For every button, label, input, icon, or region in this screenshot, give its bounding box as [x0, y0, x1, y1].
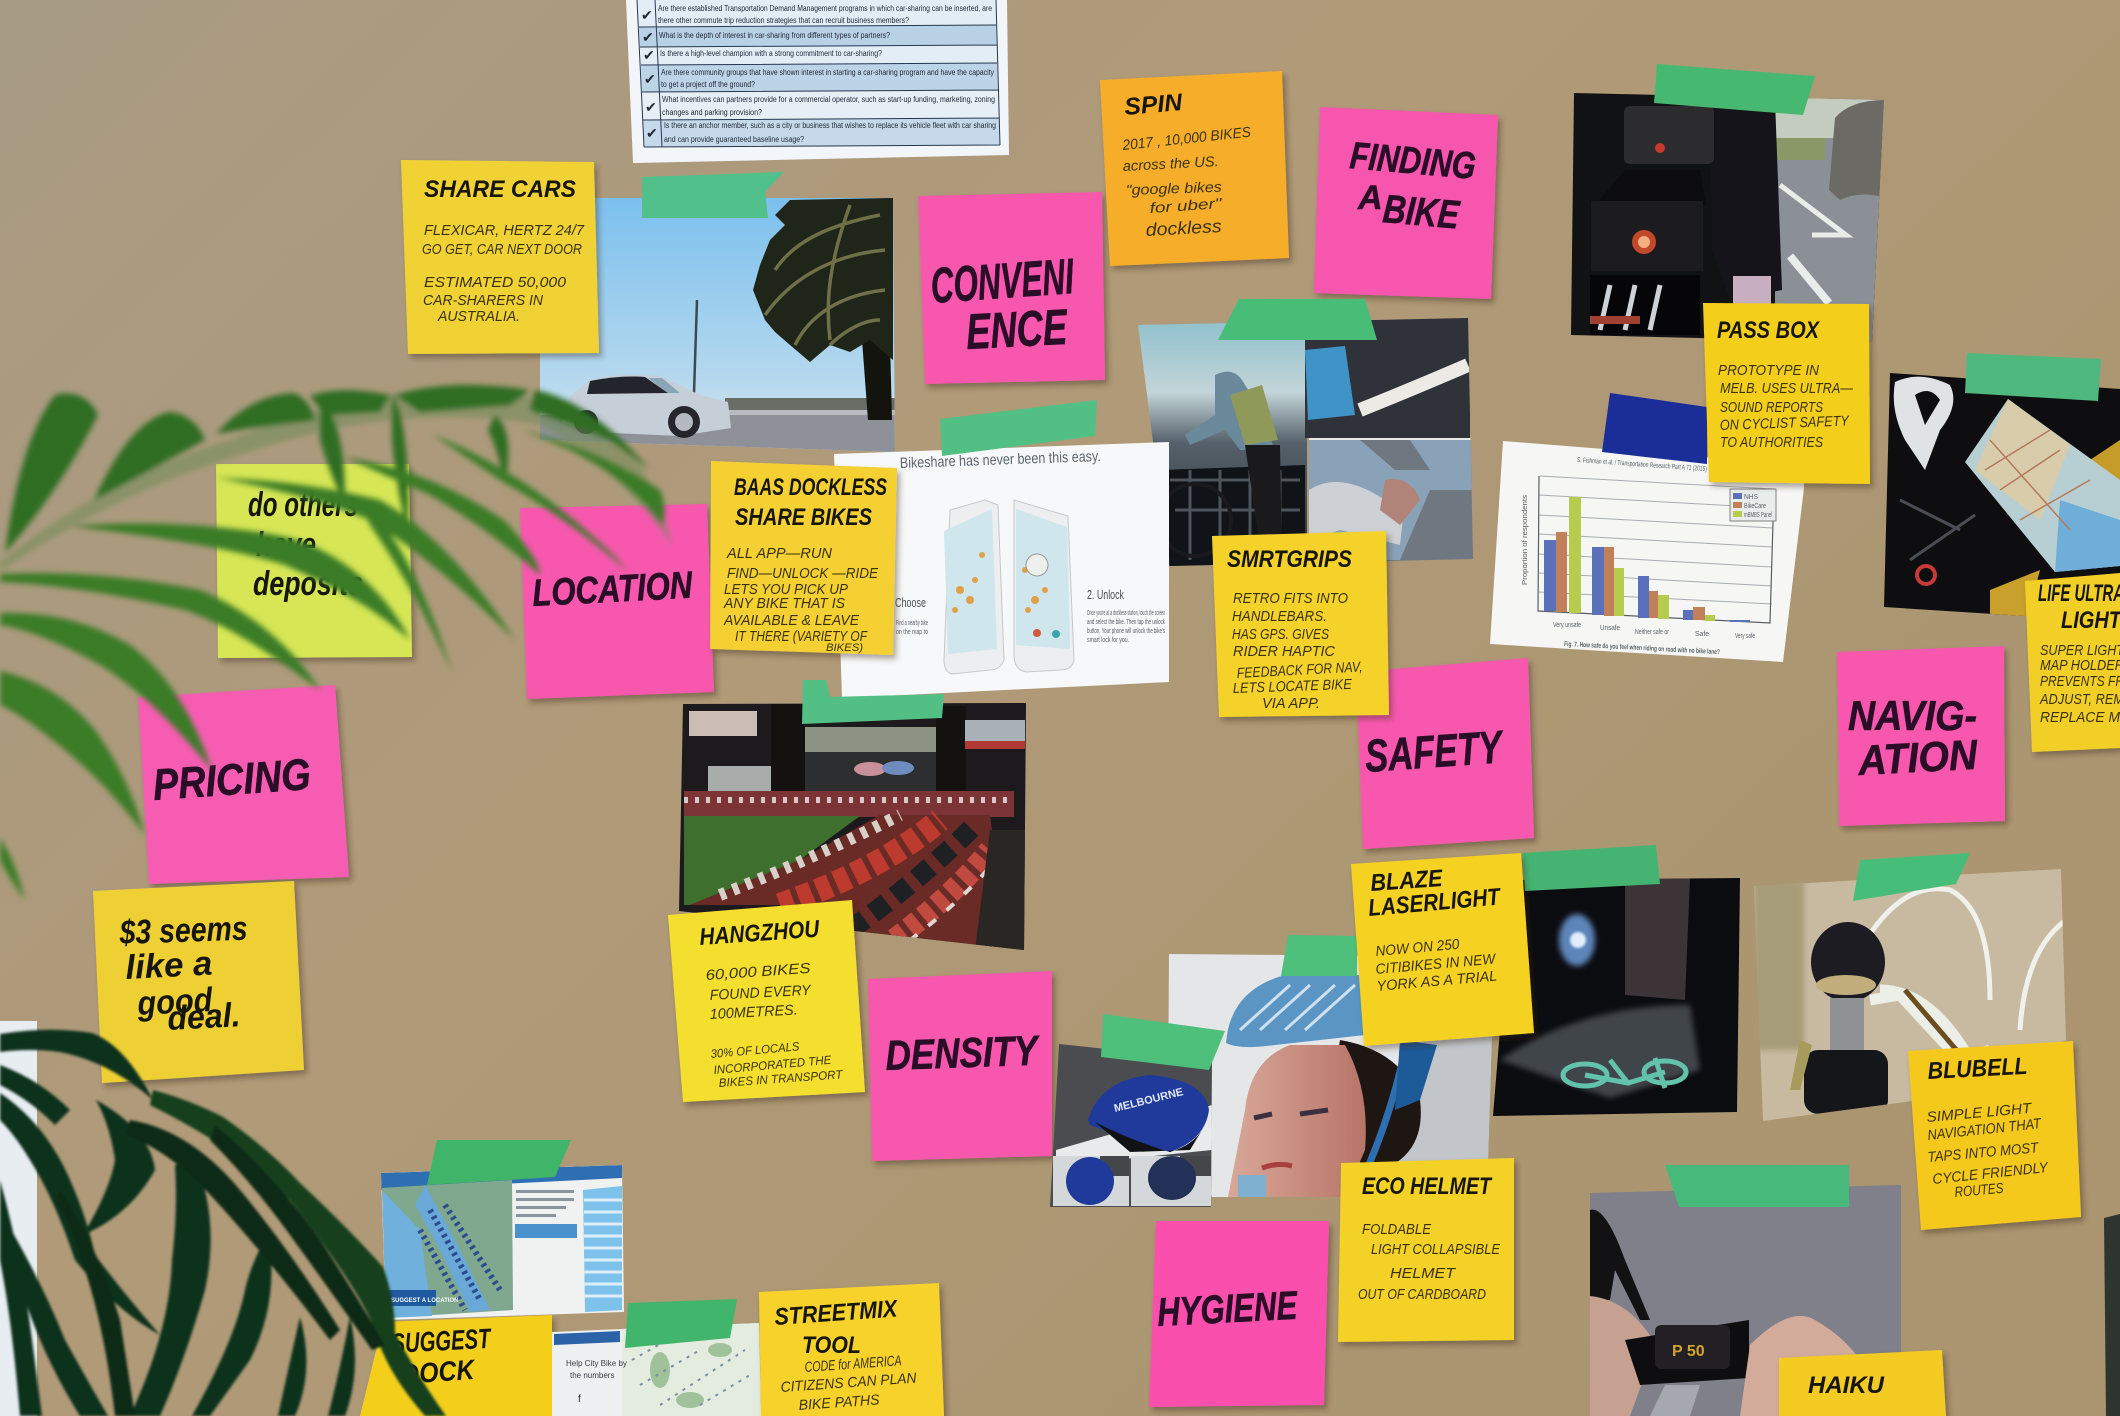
bar chart: cyclist safety perception paper: BikeCare — [1744, 503, 1766, 510]
bar chart: cyclist safety perception paper: mBMBS Panel — [1744, 512, 1772, 519]
note: Finding a bike: FINDING — [1348, 135, 1477, 188]
note: Navigation — [1837, 646, 2005, 826]
note: Hygiene: HYGIENE — [1156, 1284, 1299, 1335]
tape: city bike map flyer — [625, 1299, 737, 1348]
photo: bike bell navigation — [1750, 865, 2070, 1125]
note: $3 seems like a good deal: deal. — [166, 996, 241, 1038]
note: Pricing — [138, 685, 349, 884]
note: Streetmix tool: TOOL — [802, 1332, 861, 1359]
note: Smart grips: VIA APP. — [1262, 696, 1320, 712]
note: BaaS dockless share bikes: IT THERE (VARIETY OF — [735, 629, 868, 645]
tape: Hangzhou photo — [802, 680, 944, 724]
note: green do others have deposits: deposits — [253, 565, 363, 603]
note: green do others have deposits: have — [256, 526, 316, 564]
note: Pass box: SOUND REPORTS — [1720, 400, 1823, 416]
note: Spin — [1100, 71, 1289, 266]
photo: Melbourne bike helmet — [1050, 1044, 1215, 1209]
note: Smart grips: HAS GPS. GIVES — [1232, 627, 1329, 643]
note: Spin: "google bikes — [1126, 180, 1222, 199]
note: Streetmix tool: BIKE PATHS — [798, 1392, 880, 1414]
note: Pass box: TO AUTHORITIES — [1720, 435, 1823, 451]
note: Pass box: PASS BOX — [1717, 317, 1821, 344]
tape: handlebar photo — [1665, 1165, 1849, 1207]
panel: car-sharing checklist table: there other commute trip reduction strategies that can recruit business members? — [658, 16, 909, 25]
note: Suggest dock — [360, 1315, 552, 1416]
note: BaaS dockless share bikes: BAAS DOCKLESS — [734, 474, 887, 501]
panel: city bike map flyer: f — [578, 1394, 581, 1405]
panel: Bikeshare app flyer: and select the bike. Then tap the unlock — [1087, 619, 1165, 626]
panel: Bikeshare app flyer: Bikeshare has never been this easy. — [900, 448, 1101, 472]
note: Eco helmet: ECO HELMET — [1362, 1173, 1493, 1200]
note: Blaze laserlight — [1351, 853, 1534, 1046]
photo: handlebar display: P 50 — [1672, 1343, 1705, 1360]
note: $3 seems like a good deal — [93, 881, 304, 1083]
note: BaaS dockless share bikes — [710, 461, 897, 655]
panel: Bikeshare app flyer: smart lock for you. — [1087, 637, 1129, 644]
tape: camera photo — [1654, 64, 1815, 115]
note: Pricing: PRICING — [151, 750, 312, 810]
tape: small helmet photo — [1101, 1014, 1225, 1070]
note: Blubell: NAVIGATION THAT — [1927, 1116, 2043, 1144]
panel: car-sharing checklist table: ✔ — [644, 71, 656, 87]
note: Safety — [1356, 658, 1534, 849]
panel: Bikeshare app flyer: on the map to — [896, 629, 928, 636]
note: Blaze laserlight: LASERLIGHT — [1367, 883, 1503, 922]
note: Suggest dock: SUGGEST — [391, 1323, 493, 1359]
panel: Bikeshare app flyer: Choose — [895, 595, 926, 610]
note: Smart grips: SMRTGRIPS — [1227, 546, 1352, 573]
photo: map of suggested locations — [380, 1165, 625, 1321]
tape: blue tape on chart — [1602, 393, 1707, 464]
panel: city bike map flyer: the numbers — [570, 1371, 614, 1380]
note: BaaS dockless share bikes: LETS YOU PICK UP — [724, 582, 848, 598]
note: Blubell: SIMPLE LIGHT — [1926, 1101, 2033, 1126]
note: Spin: 2017 , 10,000 BIKES — [1121, 125, 1252, 154]
note: Blubell: ROUTES — [1954, 1181, 2004, 1201]
note: green do others have deposits: do others — [248, 486, 358, 524]
bar chart: cyclist safety perception paper: Proportion of respondents — [1522, 494, 1529, 585]
note: Safety: SAFETY — [1363, 720, 1507, 782]
bar chart: cyclist safety perception paper: NHS — [1744, 494, 1758, 501]
note: Smart grips: FEEDBACK FOR NAV, — [1236, 659, 1363, 682]
note: Streetmix tool: STREETMIX — [774, 1295, 900, 1331]
note: Share cars: FLEXICAR, HERTZ 24/7 — [424, 223, 585, 239]
note: Blaze laserlight: YORK AS A TRIAL — [1376, 968, 1498, 995]
note: Streetmix tool — [759, 1283, 944, 1416]
tape: flyer — [940, 400, 1097, 456]
photo: map of suggested locations: SUGGEST A LOCATION — [391, 1298, 458, 1304]
note: Blaze laserlight: CITIBIKES IN NEW — [1375, 951, 1497, 978]
note: Smart grips: LETS LOCATE BIKE — [1233, 677, 1352, 697]
note: Navigation: NAVIG- — [1848, 692, 1977, 739]
note: Hangzhou: INCORPORATED THE — [713, 1053, 833, 1077]
note: Eco helmet — [1338, 1158, 1514, 1342]
photo: helmet woman — [1165, 950, 1495, 1200]
note: $3 seems like a good deal: like a — [124, 944, 213, 987]
note: Pass box — [1703, 303, 1870, 484]
bar chart: cyclist safety perception paper: Safe — [1695, 631, 1709, 638]
photo: phone map holder on bike — [1880, 370, 2120, 620]
tape: bell photo — [1853, 853, 1970, 901]
tape: night photo — [1522, 845, 1660, 891]
panel: Bikeshare app flyer: Once you're at a dockless station, touch the screen — [1087, 610, 1165, 617]
panel: car-sharing checklist table: changes and parking provision? — [662, 108, 762, 117]
note: Hygiene — [1149, 1221, 1329, 1407]
panel: car-sharing checklist table: Is there an anchor member, such as a city or business that wishes to replace its vehicle fleet with car sharing — [664, 121, 996, 130]
note: Eco helmet: HELMET — [1390, 1266, 1456, 1282]
bar chart: cyclist safety perception paper: Unsafe — [1600, 625, 1620, 632]
tape: cyclist photo — [1218, 299, 1377, 340]
note: Blubell: BLUBELL — [1927, 1053, 2028, 1085]
note: Streetmix tool: CITIZENS CAN PLAN — [780, 1371, 917, 1396]
panel: car-sharing checklist table: Are there community groups that have shown interest in starting a car-sharing program and have the capacity — [661, 68, 994, 77]
panel: Bikeshare app flyer: button. Your phone will unlock the bike's — [1087, 628, 1165, 635]
note: Hangzhou: 30% OF LOCALS — [710, 1039, 800, 1061]
note: BaaS dockless share bikes: FIND—UNLOCK —RIDE — [727, 566, 878, 582]
panel: city bike map flyer: Help City Bike by — [566, 1359, 627, 1368]
dark object at right edge — [2104, 1214, 2120, 1416]
note: Hangzhou — [668, 900, 865, 1102]
note: Haiku: HAIKU — [1808, 1372, 1885, 1399]
panel: car-sharing checklist table: ✔ — [645, 99, 657, 115]
photo: laser light at night — [1490, 875, 1742, 1120]
bar chart: cyclist safety perception paper: Neither safe or — [1635, 629, 1669, 636]
photo: Hangzhou share bikes — [679, 703, 1027, 955]
bar chart: cyclist safety perception paper: Fig. 7. How safe do you feel when riding on road with no bike lane? — [1564, 641, 1720, 656]
note: Blubell: TAPS INTO MOST — [1927, 1140, 2040, 1166]
note: Hangzhou: HANGZHOU — [699, 916, 821, 951]
panel: car-sharing checklist table: Are there established Transportation Demand Management programs in which car-sharing can be inserted, are — [658, 4, 992, 13]
bar chart: cyclist safety perception paper: S. Fishman et al. / Transportation Research Part A 71 (2015) — [1577, 457, 1707, 473]
panel: car-sharing checklist table: ✔ — [641, 7, 653, 23]
note: Hangzhou: 100METRES. — [709, 1002, 798, 1023]
panel: Bikeshare app flyer — [834, 442, 1169, 698]
panel: car-sharing checklist table: ✔ — [642, 29, 654, 45]
white paper behind plant — [0, 1021, 37, 1416]
note: Eco helmet: LIGHT COLLAPSIBLE — [1371, 1242, 1500, 1258]
panel: car-sharing checklist table: and can provide guaranteed baseline usage? — [664, 135, 804, 144]
photo: handlebar display — [1590, 1185, 1902, 1416]
photo: Melbourne bike helmet: MELBOURNE — [1113, 1086, 1185, 1115]
note: Smart grips: RIDER HAPTIC — [1233, 644, 1336, 660]
note: $3 seems like a good deal: good — [136, 981, 214, 1023]
note: Blaze laserlight: BLAZE — [1370, 865, 1444, 897]
note: Finding a bike: BIKE — [1381, 187, 1462, 238]
note: Finding a bike: A — [1357, 179, 1383, 217]
note: Share cars: ESTIMATED 50,000 — [424, 275, 566, 291]
note: Share cars: GO GET, CAR NEXT DOOR — [422, 242, 582, 258]
panel: Bikeshare app flyer: Find a nearby bike — [896, 620, 928, 627]
note: BaaS dockless share bikes: BIKES) — [826, 642, 863, 654]
note: Pass box: MELB. USES ULTRA— — [1720, 381, 1853, 397]
note: Hangzhou: 60,000 BIKES — [705, 961, 811, 984]
note: green do others have deposits — [216, 464, 412, 658]
panel: car-sharing checklist table: ✔ — [643, 47, 655, 63]
note: Convenience: ENCE — [965, 299, 1070, 360]
note: Convenience: CONVENI — [929, 248, 1076, 314]
note: Share cars: SHARE CARS — [424, 176, 576, 203]
note: Blubell — [1908, 1041, 2081, 1230]
note: Location: LOCATION — [531, 565, 695, 615]
note: Spin: across the US. — [1122, 154, 1219, 175]
panel: car-sharing checklist table: Is there a high-level champion with a strong commitment to car-sharing? — [660, 49, 882, 58]
panel: car-sharing checklist table: to get a project off the ground? — [661, 80, 755, 89]
panel: car-sharing checklist table: ✔ — [646, 125, 658, 141]
tape: helmet woman photo — [1281, 935, 1357, 976]
bar chart: cyclist safety perception paper: Very safe — [1735, 633, 1755, 640]
note: Share cars: CAR-SHARERS IN — [423, 293, 544, 309]
note: Hangzhou: BIKES IN TRANSPORT — [718, 1067, 845, 1090]
note: Blubell: CYCLE FRIENDLY — [1932, 1160, 2050, 1188]
note: Density: DENSITY — [885, 1027, 1042, 1079]
note: Blaze laserlight: NOW ON 250 — [1375, 937, 1460, 960]
tape: map holder photo — [1965, 353, 2101, 401]
photo: rear bike camera box — [1570, 90, 1887, 344]
note: Spin: for uber" — [1149, 196, 1223, 217]
note: Suggest dock: DOCK — [400, 1354, 477, 1390]
note: Finding a bike — [1314, 107, 1498, 299]
note: Spin: dockless — [1145, 216, 1222, 240]
plant: dark palm fronds bottom left — [0, 1030, 446, 1416]
note: Smart grips: HANDLEBARS. — [1232, 609, 1327, 625]
note: BaaS dockless share bikes: SHARE BIKES — [735, 504, 872, 531]
note: Life ultra light (cropped at right edge) — [2025, 573, 2120, 752]
note: BaaS dockless share bikes: AVAILABLE & LEAVE — [723, 613, 859, 629]
tape: photo of car — [642, 172, 784, 218]
photo: cyclist with smart grips — [1135, 318, 1474, 568]
panel: car-sharing checklist table: What is the depth of interest in car-sharing from different types of partners? — [659, 31, 890, 40]
note: Pass box: PROTOTYPE IN — [1718, 363, 1819, 379]
tape: map photo — [427, 1140, 571, 1185]
note: Eco helmet: OUT OF CARDBOARD — [1358, 1287, 1486, 1303]
note: $3 seems like a good deal: $3 seems — [118, 910, 248, 952]
note: Pass box: ON CYCLIST SAFETY — [1720, 413, 1850, 434]
note: Eco helmet: FOLDABLE — [1362, 1222, 1431, 1238]
note: Share cars: AUSTRALIA. — [437, 309, 520, 325]
note: BaaS dockless share bikes: ANY BIKE THAT IS — [723, 596, 845, 612]
note: Haiku — [1779, 1350, 1946, 1416]
panel: car-sharing checklist table — [626, 0, 1009, 163]
note: Spin: SPIN — [1123, 89, 1184, 121]
note: Location — [520, 504, 714, 699]
note: Smart grips — [1212, 531, 1389, 717]
note: Share cars — [401, 160, 599, 354]
note: Navigation: ATION — [1856, 731, 1980, 784]
panel: Bikeshare app flyer: 2. Unlock — [1087, 587, 1124, 602]
note: BaaS dockless share bikes: ALL APP—RUN — [726, 546, 833, 562]
note: Smart grips: RETRO FITS INTO — [1233, 591, 1348, 607]
panel: car-sharing checklist table: What incentives can partners provide for a commercial operator, such as start-up funding, marketing, zoning — [662, 95, 995, 104]
photo: car and palm tree — [540, 198, 896, 454]
plant: blurred palm fronds top left — [0, 385, 672, 900]
note: Density — [868, 971, 1052, 1161]
panel: city bike map flyer — [552, 1323, 761, 1416]
note: Convenience — [918, 192, 1105, 384]
bar chart: cyclist safety perception paper: Very unsafe — [1553, 622, 1581, 629]
note: Streetmix tool: CODE for AMERICA — [804, 1353, 902, 1376]
bar chart: cyclist safety perception paper — [1490, 441, 1804, 662]
note: Hangzhou: FOUND EVERY — [709, 983, 812, 1004]
